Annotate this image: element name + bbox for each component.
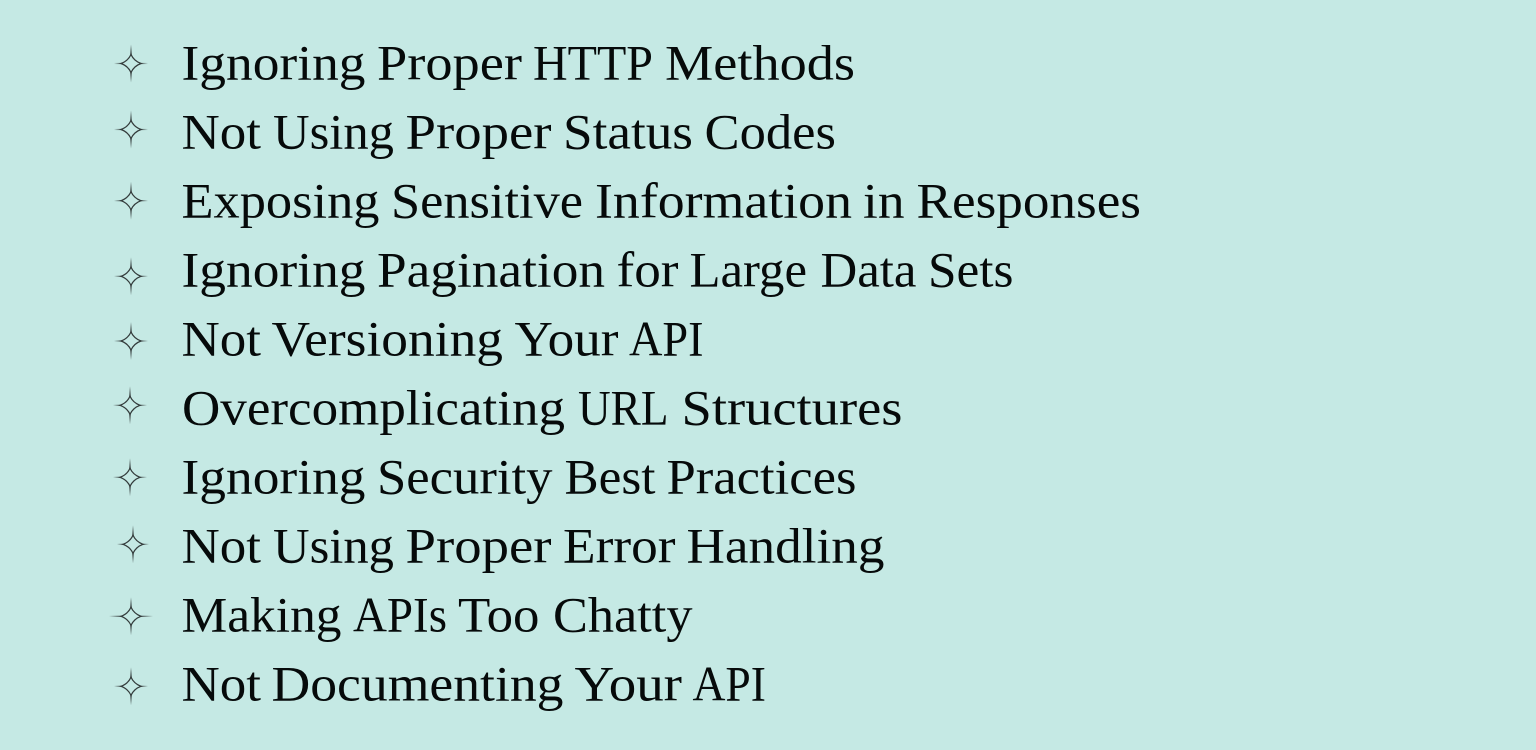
- text 10: [182, 656, 766, 712]
- item 10: [114, 656, 766, 712]
- item 7: [113, 448, 856, 504]
- icon: star 8: [117, 525, 149, 563]
- text 10: API: [692, 656, 766, 712]
- icon: star 5: [114, 322, 148, 360]
- item 3: [114, 172, 1141, 228]
- icon: star 2: [114, 110, 148, 148]
- text 9: [182, 586, 692, 642]
- text 3: Information: [595, 172, 852, 228]
- text 9: Too: [458, 586, 540, 642]
- text 4: Data: [820, 242, 916, 298]
- item 2: [114, 104, 836, 160]
- text 9: Making: [182, 586, 342, 642]
- text 1: [182, 34, 855, 90]
- text 5: API: [629, 310, 704, 366]
- text 3: in: [863, 172, 904, 228]
- text 8: Not: [182, 518, 261, 574]
- icon: star 3: [114, 182, 148, 220]
- icon: star 1: [114, 44, 148, 82]
- text 6: Structures: [682, 380, 902, 436]
- text 8: Proper: [406, 518, 552, 574]
- text 7: Practices: [666, 448, 856, 504]
- text 4: Pagination: [377, 242, 605, 298]
- text 10: Not: [182, 656, 261, 712]
- text 1: Methods: [665, 34, 855, 90]
- text 8: Using: [273, 518, 394, 574]
- text 10: Your: [574, 656, 682, 712]
- text 7: Security: [377, 448, 552, 504]
- text 2: Codes: [704, 104, 836, 160]
- text 5: Not: [182, 310, 261, 366]
- text 9: APIs: [353, 586, 447, 642]
- text 4: Large: [690, 242, 807, 298]
- text 3: [182, 172, 1141, 228]
- text 7: Ignoring: [182, 448, 366, 504]
- text 2: Not: [182, 104, 261, 160]
- text 1: Ignoring: [182, 34, 366, 90]
- text 8: Error: [563, 518, 676, 574]
- text 7: Best: [564, 448, 656, 504]
- text 4: Ignoring: [182, 242, 366, 298]
- item 5: [114, 310, 704, 366]
- item 1: [114, 34, 855, 90]
- text 4: [182, 242, 1014, 298]
- text 9: Chatty: [553, 586, 692, 642]
- text 6: [182, 380, 902, 436]
- icon: star 9: [109, 597, 153, 635]
- text 7: [182, 448, 856, 504]
- text 3: Sensitive: [391, 172, 583, 228]
- text 3: Exposing: [182, 172, 380, 228]
- text 3: Responses: [916, 172, 1141, 228]
- text 2: [182, 104, 836, 160]
- icon: star 4: [114, 257, 148, 295]
- text 5: Versioning: [272, 310, 503, 366]
- text 2: Using: [273, 104, 394, 160]
- text 6: URL: [578, 380, 668, 436]
- text 1: HTTP: [533, 34, 653, 90]
- text 8: [182, 518, 884, 574]
- item 6: [113, 380, 902, 436]
- text 4: Sets: [928, 242, 1014, 298]
- text 8: Handling: [686, 518, 884, 574]
- item 9: [109, 586, 692, 642]
- icon: star 6: [113, 386, 147, 424]
- item 4: [114, 242, 1014, 298]
- text 10: Documenting: [272, 656, 564, 712]
- text 2: Proper: [406, 104, 552, 160]
- icon: star 7: [113, 458, 147, 496]
- text 5: [182, 310, 704, 366]
- icon: star 10: [114, 667, 148, 705]
- text 1: Proper: [377, 34, 522, 90]
- text 6: Overcomplicating: [182, 380, 565, 436]
- text 5: Your: [514, 310, 619, 366]
- item 8: [117, 518, 884, 574]
- text 4: for: [616, 242, 679, 298]
- text 2: Status: [563, 104, 693, 160]
